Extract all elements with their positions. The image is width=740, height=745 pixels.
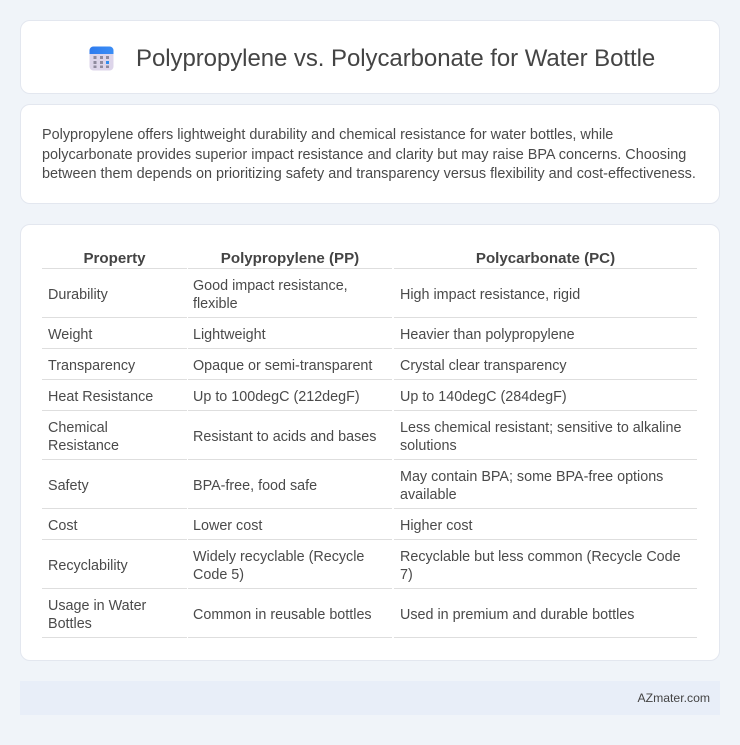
table rows: Opaque or semi-transparent — [193, 358, 372, 374]
table rows: Resistant to acids and bases — [193, 429, 376, 445]
table rows: Good impact resistance, — [193, 278, 348, 294]
table rows: Code 5) — [193, 567, 244, 583]
table rows: Transparency — [48, 358, 135, 374]
table rows: Heavier than polypropylene — [400, 327, 575, 343]
table rows: Cost — [48, 518, 78, 534]
intro card — [20, 104, 720, 204]
table rows: Up to 100degC (212degF) — [193, 389, 360, 405]
header card — [20, 20, 720, 94]
icon: calendar grid — [90, 46, 114, 70]
table rows: Durability — [48, 287, 108, 303]
table rows: May contain BPA; some BPA-free options — [400, 469, 663, 485]
table rows: Up to 140degC (284degF) — [400, 389, 567, 405]
table rows: Recyclable but less common (Recycle Code — [400, 549, 681, 565]
table rows: High impact resistance, rigid — [400, 287, 580, 303]
table rows: Usage in Water — [48, 598, 146, 614]
intro text: Polypropylene offers lightweight durability and chemical resistance for water bottles, while — [42, 127, 613, 143]
column headers — [83, 250, 615, 267]
column headers: Polycarbonate (PC) — [476, 250, 615, 267]
table rows: Heat Resistance — [48, 389, 153, 405]
column headers: Property — [83, 250, 146, 267]
table rows: Chemical — [48, 420, 108, 436]
comparison table — [42, 250, 697, 638]
table rows: Lightweight — [193, 327, 266, 343]
column headers: Polypropylene (PP) — [221, 250, 359, 267]
table rows: 7) — [400, 567, 413, 583]
footer credit: AZmater.com — [638, 691, 710, 705]
table rows: solutions — [400, 438, 457, 454]
table rows: Less chemical resistant; sensitive to alkaline — [400, 420, 681, 436]
title: Polypropylene vs. Polycarbonate for Water Bottle — [136, 45, 655, 72]
table rows: Crystal clear transparency — [400, 358, 567, 374]
table rows: BPA-free, food safe — [193, 478, 317, 494]
table card — [20, 224, 720, 661]
table rows: Higher cost — [400, 518, 473, 534]
table rows: Common in reusable bottles — [193, 607, 372, 623]
intro text: polycarbonate provides superior impact resistance and clarity but may raise BPA concerns. Choosing — [42, 146, 686, 162]
table rows: Used in premium and durable bottles — [400, 607, 634, 623]
table rows: Weight — [48, 327, 92, 343]
table rows: flexible — [193, 296, 238, 312]
table rows: Resistance — [48, 438, 119, 454]
table rows: Safety — [48, 478, 89, 494]
footer bar — [20, 681, 720, 715]
table rows: Bottles — [48, 616, 92, 632]
table rows: Lower cost — [193, 518, 262, 534]
intro text: between them depends on prioritizing safety and transparency versus flexibility and cost-effectiveness. — [42, 166, 696, 182]
table rows: available — [400, 487, 457, 503]
intro text — [42, 127, 696, 182]
table rows: Recyclability — [48, 558, 128, 574]
table rows: Widely recyclable (Recycle — [193, 549, 364, 565]
